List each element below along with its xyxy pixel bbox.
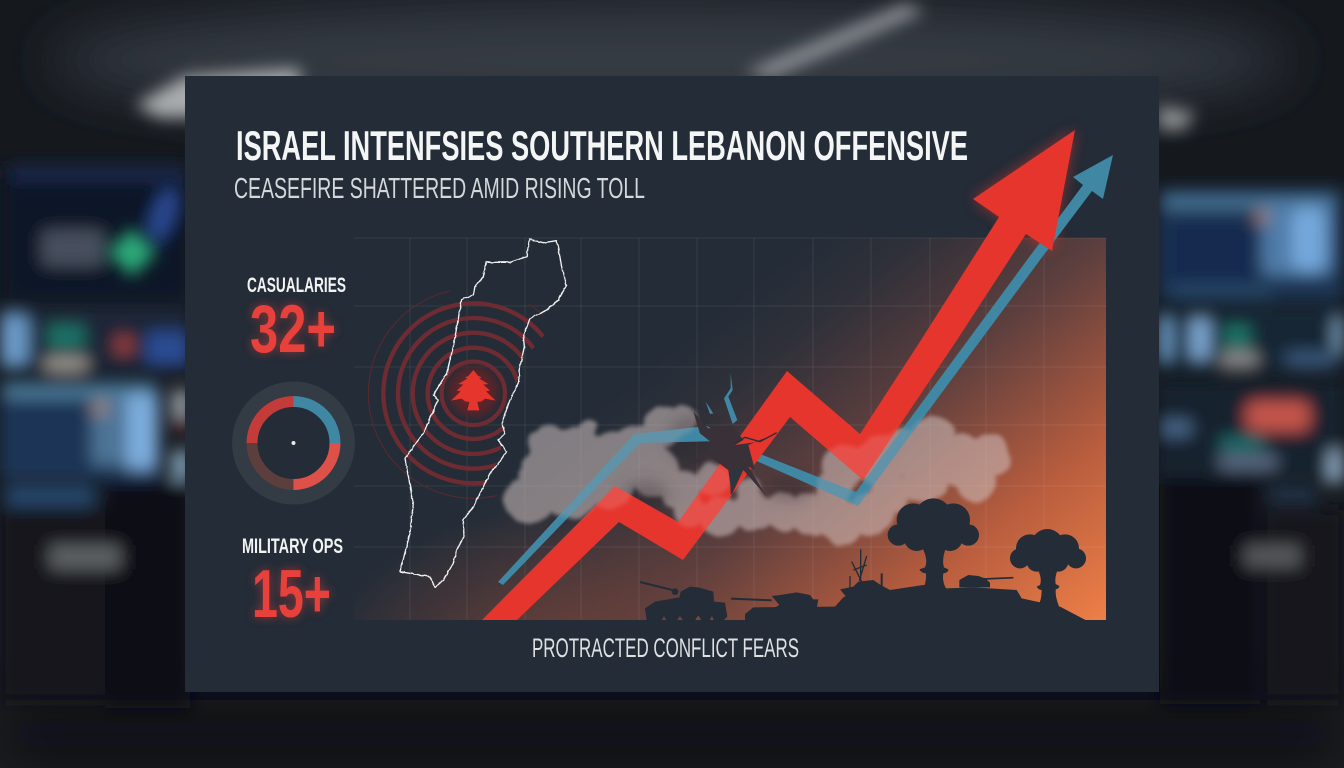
stat: casualties: 32+ <box>250 291 336 367</box>
chart: rising trend arrows <box>482 130 1113 620</box>
stat: casualties <box>247 274 346 367</box>
smoke clouds over lines <box>506 404 1010 544</box>
stat: military ops: 15+ <box>252 556 331 632</box>
stat: casualties: 32+ <box>250 291 336 367</box>
red arrow glow <box>973 130 1075 251</box>
tank 1 <box>640 582 727 621</box>
crack burst <box>688 373 777 497</box>
left screens <box>4 165 190 300</box>
panel: main infographic card <box>185 76 1159 692</box>
stat: military ops <box>242 535 343 632</box>
tank 3 <box>959 575 1013 587</box>
title: ISRAEL INTENFSIES SOUTHERN LEBANON OFFENSIVE <box>236 122 968 169</box>
map outline <box>400 239 567 587</box>
chart plot background <box>354 238 1106 620</box>
impact rings <box>383 303 563 483</box>
silhouettes: tanks, ships and mushroom clouds <box>640 498 1087 621</box>
mushroom cloud 2 <box>1010 529 1086 607</box>
stat: military ops: MILITARY OPS <box>242 535 343 558</box>
red trend arrow <box>482 130 1075 620</box>
donut chart <box>232 382 355 504</box>
smoke clouds behind lines <box>506 404 1010 544</box>
stat: military ops: 15+ <box>252 556 331 632</box>
icon: cedar tree <box>451 370 496 410</box>
hill and ship <box>745 549 1087 621</box>
green status light <box>107 228 157 277</box>
blue trend arrow <box>498 426 722 585</box>
mushroom cloud 1 <box>888 498 979 592</box>
stat: casualties: CASUALARIES <box>247 274 346 297</box>
right screens <box>1158 188 1344 300</box>
tank 2 <box>731 592 818 608</box>
map of Lebanon with impact rings <box>368 239 578 587</box>
caption: PROTRACTED CONFLICT FEARS <box>532 633 799 663</box>
subtitle: CEASEFIRE SHATTERED AMID RISING TOLL <box>234 173 645 205</box>
darker smoke pockets <box>621 416 814 509</box>
